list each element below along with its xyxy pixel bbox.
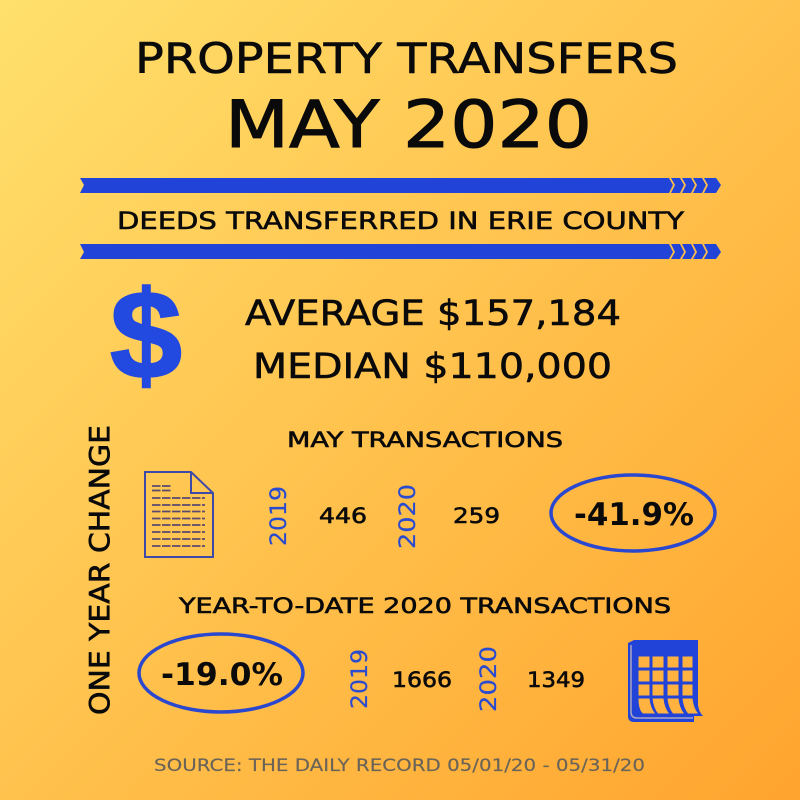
title xyxy=(135,34,678,163)
callout: -19.0%: -19.0% xyxy=(161,657,283,693)
value: 259: 259 xyxy=(453,504,500,528)
label: 2019 may: 2019 xyxy=(267,486,292,546)
label: 2020 may: 2020 xyxy=(396,484,421,549)
arrow banner: bottom xyxy=(80,244,721,259)
callout: -41.9% xyxy=(551,475,715,551)
arrow banner: top xyxy=(80,178,721,193)
icon: calendar xyxy=(628,640,703,722)
value: 1349: 1349 xyxy=(527,668,585,692)
subtitle: DEEDS TRANSFERRED IN ERIE COUNTY xyxy=(117,207,684,235)
icon: document xyxy=(145,472,213,557)
side label: one year change: ONE YEAR CHANGE xyxy=(83,425,116,715)
average price: AVERAGE $157,184 xyxy=(245,294,621,334)
title: MAY 2020 xyxy=(225,88,592,163)
median price: MEDIAN $110,000 xyxy=(253,347,612,387)
title: PROPERTY TRANSFERS xyxy=(135,34,678,83)
callout: -19.0% xyxy=(139,634,303,712)
heading: may transactions: MAY TRANSACTIONS xyxy=(287,428,563,452)
label: 2019 ytd: 2019 xyxy=(348,649,373,709)
heading: year-to-date transactions: YEAR-TO-DATE 2020 TRANSACTIONS xyxy=(178,594,671,618)
icon: dollar sign: $ xyxy=(110,266,182,405)
label: 2020 ytd: 2020 xyxy=(477,646,502,712)
value: 1666: 1666 xyxy=(392,668,452,692)
source line: SOURCE: THE DAILY RECORD 05/01/20 - 05/31/20 xyxy=(154,756,645,775)
callout: -41.9%: -41.9% xyxy=(574,497,694,533)
value: 446: 446 xyxy=(319,504,367,528)
